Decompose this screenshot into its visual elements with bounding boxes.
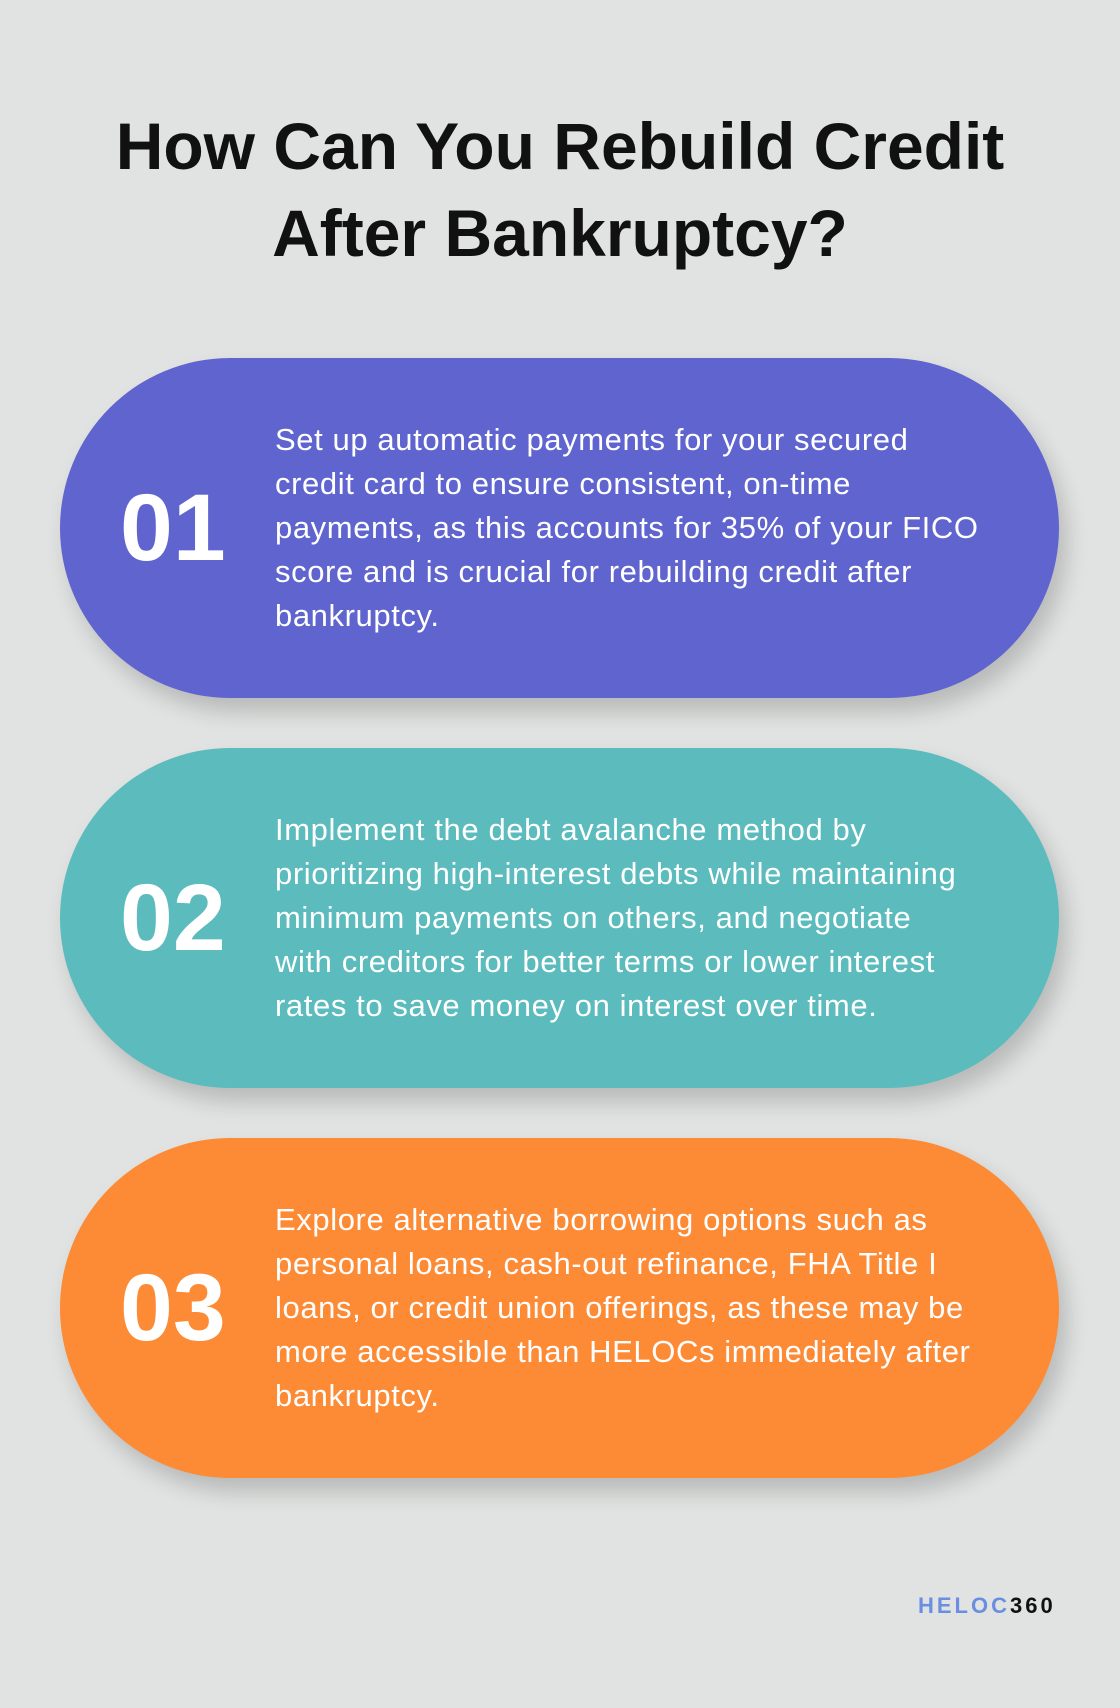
- panel: step 01: [60, 358, 1059, 698]
- text 03: Explore alternative borrowing options such as: [275, 1202, 928, 1237]
- text 03: [275, 1202, 970, 1413]
- text 01: bankruptcy.: [275, 598, 440, 633]
- text 03: loans, or credit union offerings, as these may be: [275, 1290, 964, 1325]
- text 02: rates to save money on interest over time.: [275, 988, 877, 1023]
- number 01: 01: [120, 475, 226, 581]
- text 03: personal loans, cash-out refinance, FHA Title I: [275, 1246, 937, 1281]
- text 01: [275, 422, 979, 633]
- text 02: with creditors for better terms or lower interest: [275, 944, 935, 979]
- title: [116, 109, 1004, 270]
- text 01: payments, as this accounts for 35% of your FICO: [275, 510, 979, 545]
- logo: HELOC360: [918, 1593, 1056, 1618]
- title: How Can You Rebuild Credit: [116, 109, 1004, 183]
- text 03: more accessible than HELOCs immediately after: [275, 1334, 970, 1369]
- number 03: 03: [120, 1255, 226, 1361]
- text 02: prioritizing high-interest debts while maintaining: [275, 856, 956, 891]
- text 03: bankruptcy.: [275, 1378, 440, 1413]
- text 01: score and is crucial for rebuilding credit after: [275, 554, 912, 589]
- text 02: minimum payments on others, and negotiate: [275, 900, 911, 935]
- title: After Bankruptcy?: [272, 196, 848, 270]
- panel: step 03: [60, 1138, 1059, 1478]
- text 01: Set up automatic payments for your secured: [275, 422, 908, 457]
- text 02: Implement the debt avalanche method by: [275, 812, 866, 847]
- number 02: 02: [120, 865, 226, 971]
- text 02: [275, 812, 956, 1023]
- text 01: credit card to ensure consistent, on-time: [275, 466, 851, 501]
- panel: step 02: [60, 748, 1059, 1088]
